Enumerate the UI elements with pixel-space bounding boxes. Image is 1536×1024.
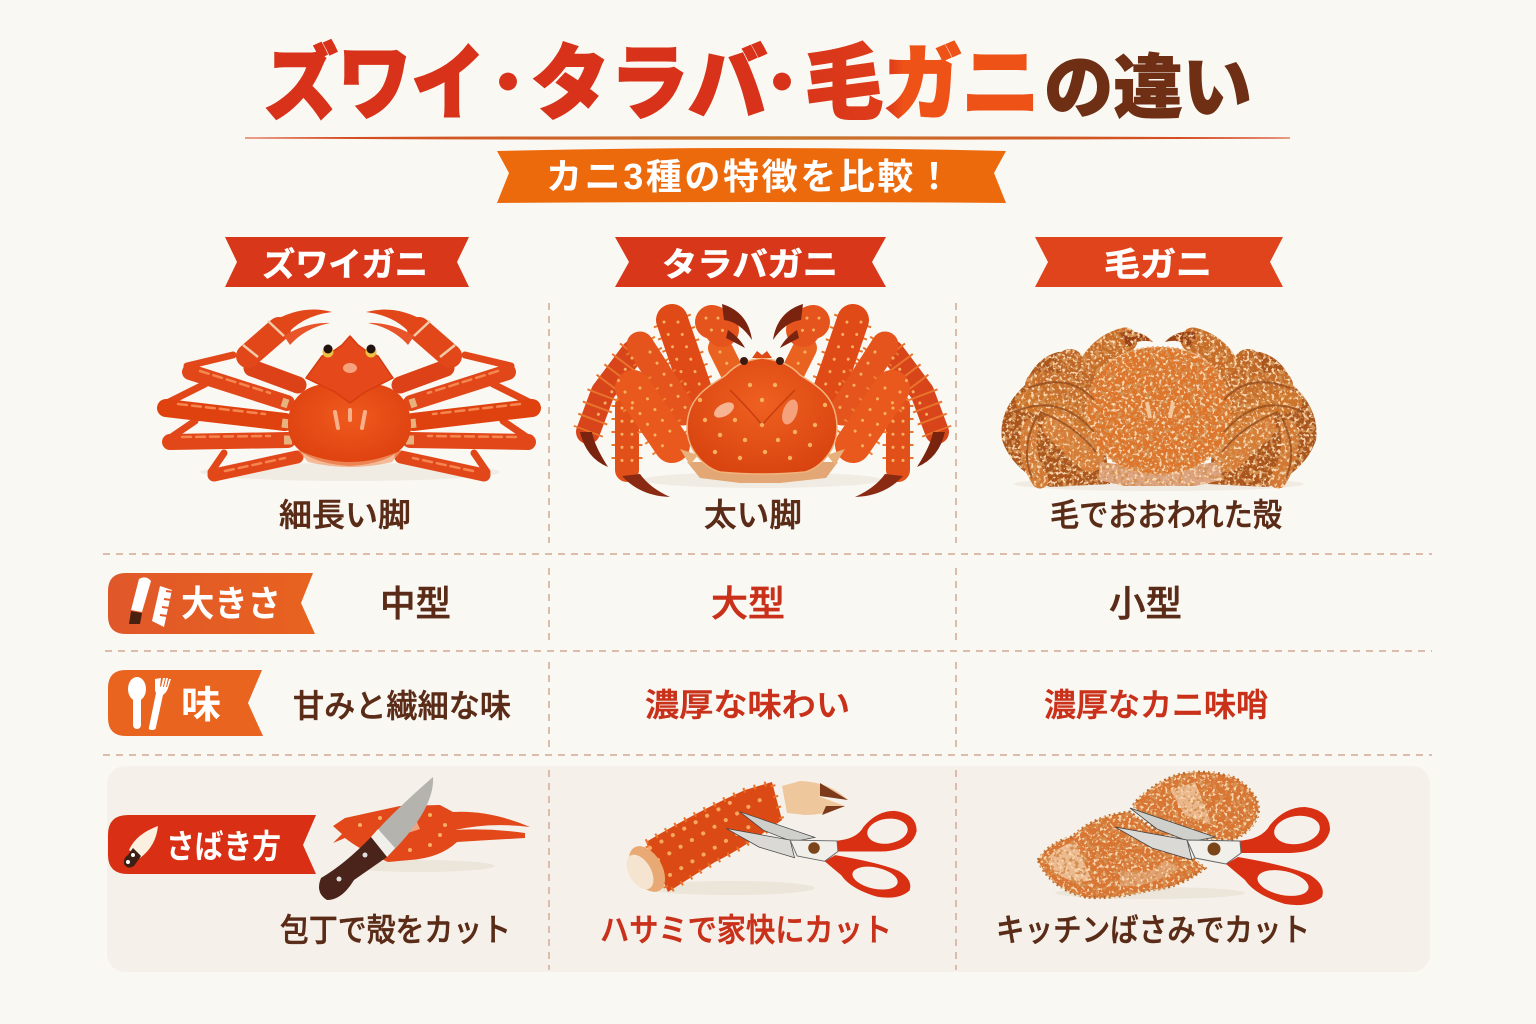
row value: 甘みと繊細な味: 甘みと繊細な味 [293, 688, 511, 724]
row value: ハサミで家快にカット: ハサミで家快にカット [600, 912, 892, 948]
row value: 濃厚なカニ味哨: 濃厚なカニ味哨 [1044, 687, 1268, 723]
row label: 大きさ [108, 573, 315, 634]
claw [333, 805, 530, 862]
knife [371, 777, 433, 857]
title: ・ [476, 48, 540, 120]
column header: ズワイガニ: ズワイガニ [262, 246, 428, 283]
column header: 毛ガニ [1035, 237, 1283, 287]
illustration: タラバガニ [580, 304, 945, 497]
illustration: ハサミとタラバ脚 [621, 781, 917, 898]
column header: ズワイガニ [225, 237, 469, 287]
row value: 濃厚な味わい: 濃厚な味わい [645, 687, 850, 723]
bottom panel: さばき方 background [107, 766, 1430, 972]
column header: タラバガニ [615, 237, 886, 287]
subtitle ribbon: カニ3種の特徴を比較！ [546, 156, 952, 197]
row label: 味: 味 [181, 685, 221, 727]
illustration: 毛ガニ [1001, 332, 1317, 491]
title: 毛ガニ [805, 39, 1040, 130]
illustration: ズワイガニ [163, 310, 535, 481]
row value: 中型: 中型 [380, 583, 451, 624]
caption: 細長い脚: 細長い脚 [279, 497, 411, 533]
row label: さばき方: さばき方 [166, 828, 281, 865]
column header: タラバガニ: タラバガニ [662, 246, 838, 283]
caption: 太い脚: 太い脚 [704, 497, 802, 533]
illustration: 包丁とカニ爪 [319, 777, 530, 900]
row label: さばき方 [108, 815, 316, 874]
icon: spoon and fork [128, 677, 171, 730]
title: の違い [1044, 49, 1252, 127]
illustration: ハサミと毛ガニ [1038, 772, 1330, 905]
row label: 大きさ: 大きさ [181, 583, 281, 624]
subtitle ribbon [497, 148, 1006, 203]
title underline [245, 137, 1290, 139]
scissors [1115, 807, 1330, 905]
crab piece [1038, 772, 1259, 898]
row value: 大型: 大型 [711, 583, 785, 624]
caption: 毛でおおわれた殻: 毛でおおわれた殻 [1050, 497, 1282, 533]
title: ・ [750, 48, 814, 120]
icon: knife [124, 826, 158, 868]
title: ズワイ [264, 39, 485, 130]
row value: 小型: 小型 [1109, 583, 1182, 624]
leg [621, 781, 848, 898]
row value: 包丁で殻をカット: 包丁で殻をカット [280, 912, 511, 948]
scissors [726, 811, 917, 898]
icon: ruler and brush [129, 577, 173, 627]
row label: 味 [108, 670, 263, 736]
row value: キッチンばさみでカット: キッチンばさみでカット [996, 912, 1310, 948]
title: タラバ [531, 39, 767, 130]
column header: 毛ガニ: 毛ガニ [1104, 246, 1212, 283]
title [264, 39, 1252, 130]
